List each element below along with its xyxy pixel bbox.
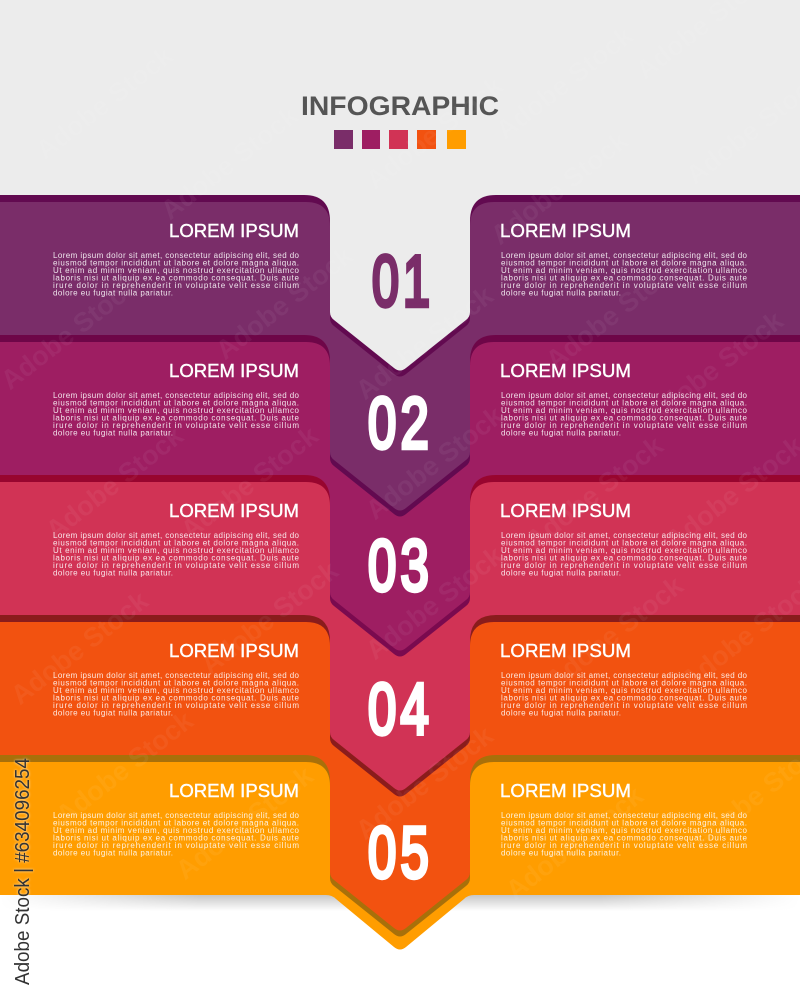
body text: Ut enim ad minim veniam, quis nostrud exercitation ullamco <box>501 686 748 695</box>
arrow 01: 01 <box>372 242 434 322</box>
heading: LOREM IPSUM <box>169 780 299 801</box>
body text: Lorem ipsum dolor sit amet, consectetur adipiscing elit, sed do <box>53 531 300 540</box>
panel: step 1 left text <box>53 220 300 298</box>
body text: dolore eu fugiat nulla pariatur. <box>53 848 173 858</box>
heading: LOREM IPSUM <box>169 360 299 381</box>
body text: eiusmod tempor incididunt ut labore et dolore magna aliqua. <box>53 678 299 688</box>
watermark pattern: Adobe Stock <box>490 20 639 146</box>
panel: step 4 left text <box>53 640 300 718</box>
body text: laboris nisi ut aliquip ex ea commodo consequat. Duis aute <box>53 274 300 282</box>
watermark pattern: Adobe Stock <box>5 585 154 711</box>
watermark pattern: Adobe Stock <box>175 420 324 546</box>
watermark pattern: Adobe Stock <box>520 430 669 556</box>
body text: dolore eu fugiat nulla pariatur. <box>53 708 173 718</box>
body text: Lorem ipsum dolor sit amet, consectetur adipiscing elit, sed do <box>501 251 748 260</box>
body text <box>501 531 748 578</box>
body text: Lorem ipsum dolor sit amet, consectetur adipiscing elit, sed do <box>501 531 748 540</box>
title: INFOGRAPHIC <box>301 91 499 121</box>
heading: LOREM IPSUM <box>169 640 299 661</box>
band backgrounds: step 5 <box>0 755 800 895</box>
watermark pattern: Adobe Stock <box>155 100 304 226</box>
watermark pattern: Adobe Stock <box>360 70 509 196</box>
heading: LOREM IPSUM <box>500 360 631 381</box>
watermark pattern: Adobe Stock <box>540 250 689 376</box>
watermark pattern: Adobe Stock <box>350 720 499 846</box>
body text: irure dolor in reprehenderit in voluptate velit esse cillum <box>53 421 299 430</box>
body text <box>501 811 748 858</box>
body text: laboris nisi ut aliquip ex ea commodo consequat. Duis aute <box>53 834 300 842</box>
body text: Ut enim ad minim veniam, quis nostrud exercitation ullamco <box>53 546 300 555</box>
panel: step 3 left text <box>53 500 300 578</box>
panel: step 5 right text <box>500 780 748 858</box>
body text: Ut enim ad minim veniam, quis nostrud exercitation ullamco <box>501 266 748 275</box>
arrow 02 <box>330 195 470 516</box>
body text: laboris nisi ut aliquip ex ea commodo consequat. Duis aute <box>53 554 300 562</box>
body text: Lorem ipsum dolor sit amet, consectetur adipiscing elit, sed do <box>501 391 748 400</box>
body text: irure dolor in reprehenderit in voluptate velit esse cillum <box>501 701 747 710</box>
watermark pattern: Adobe Stock <box>640 305 789 431</box>
body text: dolore eu fugiat nulla pariatur. <box>53 568 173 578</box>
body text: laboris nisi ut aliquip ex ea commodo consequat. Duis aute <box>53 414 300 422</box>
body text: eiusmod tempor incididunt ut labore et dolore magna aliqua. <box>501 538 747 548</box>
body text: Lorem ipsum dolor sit amet, consectetur adipiscing elit, sed do <box>53 811 300 820</box>
body text <box>53 531 300 578</box>
body text: irure dolor in reprehenderit in voluptate velit esse cillum <box>53 281 299 290</box>
body text: Ut enim ad minim veniam, quis nostrud exercitation ullamco <box>53 686 300 695</box>
panel: step 1 right text <box>500 220 748 298</box>
heading: LOREM IPSUM <box>169 220 299 241</box>
body text: Lorem ipsum dolor sit amet, consectetur adipiscing elit, sed do <box>501 671 748 680</box>
arrow 03 <box>330 195 470 656</box>
body text: laboris nisi ut aliquip ex ea commodo consequat. Duis aute <box>501 414 748 422</box>
body text: dolore eu fugiat nulla pariatur. <box>501 568 621 578</box>
arrow 01 <box>330 195 470 376</box>
colour key squares <box>334 130 466 149</box>
band backgrounds: step 1 <box>0 195 800 370</box>
arrow 04 <box>330 195 470 796</box>
body text: Lorem ipsum dolor sit amet, consectetur adipiscing elit, sed do <box>501 811 748 820</box>
body text: irure dolor in reprehenderit in voluptate velit esse cillum <box>53 701 299 710</box>
body text <box>53 391 300 438</box>
body text: Ut enim ad minim veniam, quis nostrud exercitation ullamco <box>501 546 748 555</box>
drop shadow under bottom band <box>0 895 800 911</box>
heading: LOREM IPSUM <box>500 640 631 661</box>
body text: laboris nisi ut aliquip ex ea commodo consequat. Duis aute <box>501 694 748 702</box>
body text: laboris nisi ut aliquip ex ea commodo consequat. Duis aute <box>501 274 748 282</box>
body text: Lorem ipsum dolor sit amet, consectetur adipiscing elit, sed do <box>53 391 300 400</box>
body text: eiusmod tempor incididunt ut labore et dolore magna aliqua. <box>53 818 299 828</box>
body text: irure dolor in reprehenderit in voluptate velit esse cillum <box>501 421 747 430</box>
band backgrounds: step 3 <box>0 475 800 650</box>
watermark pattern: Adobe Stock <box>210 240 359 366</box>
body text: irure dolor in reprehenderit in voluptate velit esse cillum <box>53 841 299 850</box>
body text: dolore eu fugiat nulla pariatur. <box>53 288 173 298</box>
panel: step 2 right text <box>500 360 748 438</box>
watermark pattern: Adobe Stock <box>350 280 499 406</box>
heading: LOREM IPSUM <box>500 780 631 801</box>
body text: dolore eu fugiat nulla pariatur. <box>501 428 621 438</box>
watermark pattern: Adobe Stock <box>360 540 509 666</box>
arrow 04: 04 <box>368 670 433 750</box>
body text <box>501 251 748 298</box>
body text: irure dolor in reprehenderit in voluptate velit esse cillum <box>501 281 747 290</box>
body text <box>53 811 300 858</box>
body text <box>53 251 300 298</box>
arrow 02: 02 <box>368 384 433 464</box>
body text: Lorem ipsum dolor sit amet, consectetur adipiscing elit, sed do <box>53 671 300 680</box>
stock image id label: Adobe Stock | #634096254 <box>12 758 34 985</box>
heading: LOREM IPSUM <box>500 220 631 241</box>
panel: step 4 right text <box>500 640 748 718</box>
body text: laboris nisi ut aliquip ex ea commodo consequat. Duis aute <box>501 834 748 842</box>
body text: eiusmod tempor incididunt ut labore et dolore magna aliqua. <box>501 818 747 828</box>
body text: eiusmod tempor incididunt ut labore et dolore magna aliqua. <box>501 678 747 688</box>
watermark pattern: Adobe Stock <box>195 555 344 681</box>
body text: irure dolor in reprehenderit in voluptate velit esse cillum <box>501 841 747 850</box>
body text: dolore eu fugiat nulla pariatur. <box>501 848 621 858</box>
arrow base: yellow <box>324 195 476 950</box>
body text: Ut enim ad minim veniam, quis nostrud exercitation ullamco <box>501 406 748 415</box>
body text: eiusmod tempor incididunt ut labore et dolore magna aliqua. <box>501 258 747 268</box>
watermark pattern: Adobe Stock <box>170 760 319 886</box>
body text: Ut enim ad minim veniam, quis nostrud exercitation ullamco <box>501 826 748 835</box>
arrow 05 <box>330 195 470 936</box>
body text: Ut enim ad minim veniam, quis nostrud exercitation ullamco <box>53 406 300 415</box>
body text: laboris nisi ut aliquip ex ea commodo consequat. Duis aute <box>501 554 748 562</box>
panel: step 3 right text <box>500 500 748 578</box>
body text: dolore eu fugiat nulla pariatur. <box>53 428 173 438</box>
body text: laboris nisi ut aliquip ex ea commodo consequat. Duis aute <box>53 694 300 702</box>
body text: Lorem ipsum dolor sit amet, consectetur adipiscing elit, sed do <box>53 251 300 260</box>
body text: eiusmod tempor incididunt ut labore et dolore magna aliqua. <box>501 398 747 408</box>
panel: step 5 left text <box>53 780 300 858</box>
watermark pattern: Adobe Stock <box>485 125 634 251</box>
arrow 03: 03 <box>368 526 433 606</box>
watermark pattern: Adobe Stock <box>50 705 199 831</box>
body text <box>53 671 300 718</box>
watermark pattern: Adobe Stock <box>540 570 689 696</box>
band backgrounds: step 4 <box>0 615 800 790</box>
body text: eiusmod tempor incididunt ut labore et dolore magna aliqua. <box>53 258 299 268</box>
heading: LOREM IPSUM <box>169 500 299 521</box>
heading: LOREM IPSUM <box>500 500 631 521</box>
body text: dolore eu fugiat nulla pariatur. <box>501 288 621 298</box>
body text: irure dolor in reprehenderit in voluptate velit esse cillum <box>53 561 299 570</box>
body text: Ut enim ad minim veniam, quis nostrud exercitation ullamco <box>53 826 300 835</box>
body text <box>501 671 748 718</box>
arrow 05: 05 <box>368 814 433 894</box>
panel: step 2 left text <box>53 360 300 438</box>
body text: eiusmod tempor incididunt ut labore et dolore magna aliqua. <box>53 398 299 408</box>
watermark pattern: Adobe Stock <box>360 400 509 526</box>
body text: dolore eu fugiat nulla pariatur. <box>501 708 621 718</box>
watermark pattern: Adobe Stock <box>500 780 649 906</box>
body text: eiusmod tempor incididunt ut labore et dolore magna aliqua. <box>53 538 299 548</box>
body text <box>501 391 748 438</box>
band backgrounds: step 2 <box>0 335 800 510</box>
body text: irure dolor in reprehenderit in voluptate velit esse cillum <box>501 561 747 570</box>
watermark pattern: Adobe Stock <box>30 40 179 166</box>
watermark pattern: Adobe Stock <box>40 420 189 546</box>
body text: Ut enim ad minim veniam, quis nostrud exercitation ullamco <box>53 266 300 275</box>
